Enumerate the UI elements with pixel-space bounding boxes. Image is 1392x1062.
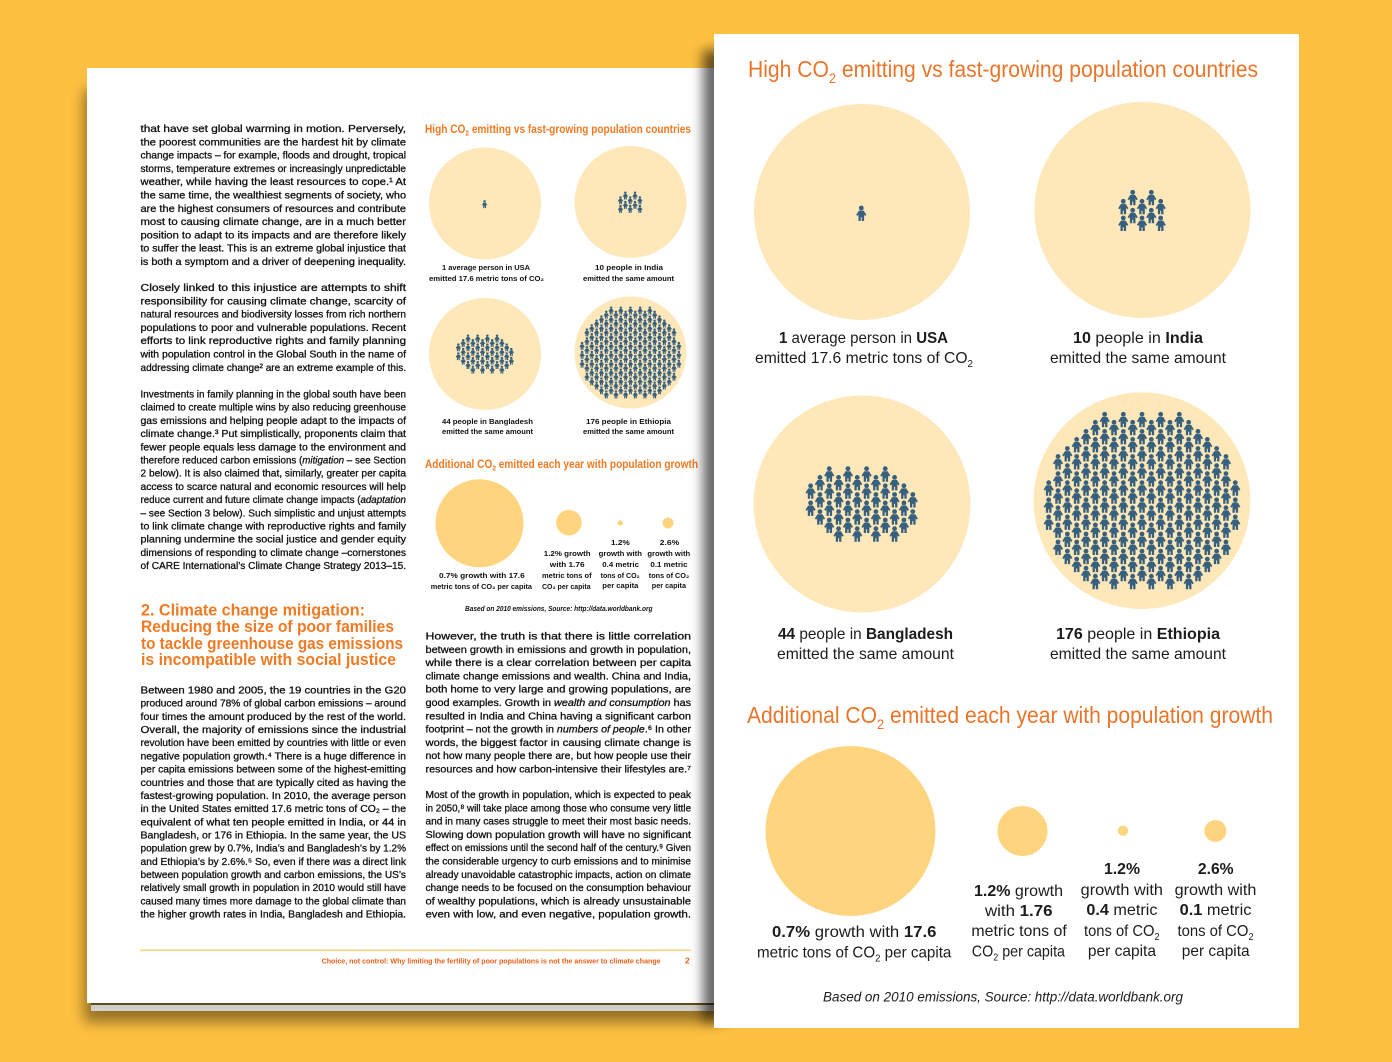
text block: right column paragraphs: change needs to be focused on the consumption behaviour	[426, 883, 692, 894]
text block: left column, top paragraphs: natural resources and biodiversity losses from rich northern	[140, 310, 406, 321]
small captions: growth: CO₂ per capita	[542, 582, 591, 591]
small captions: four countries	[429, 263, 674, 436]
text block: left column, top paragraphs: planning undermine the social justice and gender equity	[140, 535, 407, 546]
small captions: four countries: 1 average person in USA	[442, 263, 530, 272]
text block: left column, bottom paragraph: fastest-growing population. In 2010, the average person	[140, 791, 406, 802]
small captions: growth	[431, 538, 691, 591]
small captions: growth: 0.4 metric	[602, 560, 639, 569]
caption: Ethiopia growth: 2	[1248, 932, 1254, 943]
text block: left column, top paragraphs: efforts to link reproductive rights and family planning	[140, 336, 406, 347]
text block: left column, top paragraphs: Investments in family planning in the global south have been	[140, 390, 406, 400]
footer: rule, running title and page number: Choice, not control: Why limiting the fertility of poor populations is not the answer to climate change	[322, 956, 661, 966]
text block: left column, top paragraphs: are the highest consumers of resources and contribute	[140, 204, 406, 215]
text block: right column paragraphs: even with low, and even negative, population growth.	[426, 910, 691, 921]
text block: left column, top paragraphs: weather, while having the least resources to cope.¹ At	[139, 177, 406, 188]
caption: USA growth: metric tons of CO	[757, 944, 881, 962]
heading: section 2	[141, 602, 403, 669]
caption: Bangladesh growth: 0.4 metric	[1086, 902, 1158, 919]
footer: rule, running title and page number	[140, 950, 691, 966]
text block: left column, bottom paragraph: the higher growth rates in India, Bangladesh and Ethiopia.	[140, 910, 406, 921]
caption: USA: emitted 17.6 metric tons of CO	[755, 350, 972, 367]
text block: left column, bottom paragraph: negative population growth.⁴ There is a huge difference in	[140, 751, 406, 762]
heading: small high CO2 title: 2	[465, 128, 469, 138]
text block: left column, top paragraphs: Closely linked to this injustice are attempts to shift	[140, 283, 406, 294]
text block: right column paragraphs: already unavoidable catastrophic impacts, action on climate	[426, 870, 691, 881]
text block: right column paragraphs: not how many people there are, but how people use their	[426, 751, 692, 762]
caption: India growth: per capita	[998, 944, 1065, 960]
text block: right column paragraphs: footprint – not the growth in numbers of people.⁶ In other	[426, 725, 692, 736]
small captions: growth: tons of CO₂	[601, 571, 640, 580]
text block: left column, top paragraphs: the poorest communities are the hardest hit by climate	[140, 137, 406, 148]
text block: right column paragraphs: However, the truth is that there is little correlation	[426, 632, 691, 642]
text block: left column, bottom paragraph: countries and those that are typically cited as having the	[140, 778, 406, 789]
caption: India: emitted the same amount	[1050, 350, 1227, 367]
small captions: growth: per capita	[652, 581, 687, 590]
text block: left column, bottom paragraph: population grew by 0.7%, India’s and Bangladesh’s by 1.2%	[140, 844, 406, 855]
caption: Bangladesh: emitted the same amount	[777, 646, 955, 663]
text block: left column, top paragraphs: of CARE International’s Climate Change Strategy 2013–15.	[140, 561, 406, 572]
caption: India growth: metric tons of	[971, 923, 1067, 940]
caption: India	[1050, 330, 1227, 367]
small captions: four countries: emitted 17.6 metric tons of CO₂	[429, 274, 544, 283]
caption: India growth: with 1.76	[984, 903, 1053, 920]
text block: left column, top paragraphs: most to causing climate change, are in a much better	[140, 217, 407, 228]
text block: left column, top paragraphs: reduce current and future climate change impacts (adaptation	[140, 495, 406, 506]
text block: right column paragraphs: in 2050,⁸ will take place among those who consume very little	[426, 803, 691, 814]
small captions: four countries: 176 people in Ethiopia	[586, 417, 672, 426]
text block: right column paragraphs: resulted in India and China having a significant carbon	[426, 711, 691, 722]
text block: left column, top paragraphs	[139, 124, 407, 572]
text block: left column, top paragraphs: with population control in the Global South in the name of	[139, 350, 406, 360]
text block: right column paragraphs: effect on emissions until the second half of the century.⁹ Given	[426, 843, 691, 854]
text block: left column, bottom paragraph: in the United States emitted 17.6 metric tons of CO₂ – the	[140, 804, 406, 815]
heading: section 2: Reducing the size of poor families	[141, 618, 394, 636]
heading: small high CO2 title: High CO	[425, 124, 471, 136]
caption: Ethiopia growth: 2.6%	[1198, 861, 1234, 878]
text block: left column, top paragraphs: therefore reduced carbon emissions (mitigation – see Section	[140, 456, 406, 466]
text block: left column, top paragraphs: climate change.³ Put simplistically, proponents claim that	[140, 429, 406, 440]
text block: left column, bottom paragraph: Overall, the majority of emissions since the industrial	[140, 725, 406, 736]
text block: right column paragraphs: the considerable urgency to curb emissions and to minimise	[426, 856, 691, 868]
small captions: growth: 1.2%	[611, 538, 630, 547]
text block: right column paragraphs: of wealthy populations, which is already unsustainable	[426, 896, 691, 907]
caption: Ethiopia growth: growth with	[1175, 882, 1256, 899]
text block: left column, bottom paragraph: caused many times more damage to the global climate than	[140, 896, 406, 907]
text block: left column, top paragraphs: populations to poor and vulnerable populations. Recent	[140, 323, 406, 334]
text block: left column, bottom paragraph: relatively small growth in population in 2010 would still have	[140, 883, 406, 894]
small captions: growth: per capita	[602, 581, 639, 590]
text block: left column, top paragraphs: to link climate change with reproductive rights and family	[140, 522, 407, 532]
small captions: four countries: emitted the same amount	[442, 427, 533, 436]
text block: left column, bottom paragraph: revolution have been emitted by countries with little or even	[140, 738, 406, 749]
text block: left column, bottom paragraph: four times the amount produced by the rest of the world.	[140, 712, 406, 723]
text block: right column paragraphs	[424, 632, 692, 921]
heading: section 2: 2. Climate change mitigation:	[141, 602, 365, 620]
small captions: growth: growth with	[647, 549, 691, 558]
text block: left column, top paragraphs: access to scarce natural and economic resources will help	[140, 482, 406, 493]
caption: Ethiopia growth	[1175, 861, 1256, 960]
small captions: growth: growth with	[599, 549, 642, 558]
caption: Ethiopia: 176 people in Ethiopia	[1056, 626, 1220, 643]
text block: right column paragraphs: while there is a clear correlation between per capita	[424, 658, 691, 669]
caption: USA growth: 0.7% growth with 17.6	[772, 924, 937, 941]
caption: Bangladesh growth: tons of CO	[1084, 923, 1160, 940]
circle: India growth	[998, 806, 1048, 856]
text block: left column, bottom paragraph: and Ethiopia’s by 2.6%.⁵ So, even if there was a direct link	[140, 857, 407, 868]
caption: India growth	[971, 883, 1067, 964]
circle: Bangladesh with 44 people	[754, 396, 970, 612]
caption: USA: 2	[968, 359, 973, 370]
text block: left column, top paragraphs: 2 below). It is also claimed that, similarly, greater per capita	[140, 469, 406, 480]
source note: Based on 2010 emissions, Source: http://data.worldbank.org	[823, 990, 1183, 1004]
text block: left column, top paragraphs: – see Section 3 below). Such simplistic and unjust attempts	[140, 508, 406, 519]
caption: USA growth: 2	[875, 954, 881, 964]
circle: Ethiopia growth	[1204, 820, 1226, 842]
caption: Ethiopia: emitted the same amount	[1050, 646, 1227, 663]
caption: India growth: 1.2% growth	[974, 883, 1063, 900]
text block: left column, bottom paragraph: equivalent of what ten people emitted in India, or 44 in	[140, 817, 406, 828]
small captions: growth: 0.1 metric	[650, 560, 688, 569]
text block: right column paragraphs: Most of the growth in population, which is expected to peak	[426, 790, 692, 801]
caption: Bangladesh growth: 1.2%	[1104, 861, 1140, 878]
caption: Bangladesh	[777, 626, 955, 663]
circle: Ethiopia with 176 people	[1034, 392, 1250, 609]
heading: additional CO2 title: 2	[877, 716, 884, 732]
small captions: four countries: emitted the same amount	[583, 274, 674, 283]
heading: small additional CO2 title: Additional CO	[425, 459, 502, 471]
heading: additional CO2 title: emitted each year with population growth	[884, 702, 1273, 728]
small captions: four countries: 10 people in India	[595, 263, 664, 272]
caption: India growth: 2	[993, 952, 999, 964]
caption: Bangladesh: 44 people in Bangladesh	[778, 626, 953, 643]
text block: left column, top paragraphs: is both a symptom and a driver of deepening inequality.	[140, 257, 406, 268]
caption: Ethiopia	[1050, 626, 1227, 663]
small source note: Based on 2010 emissions, Source: http://data.worldbank.org	[465, 606, 653, 613]
heading: small high CO2 title: emitting vs fast-growing population countries	[469, 124, 691, 136]
small captions: growth: tons of CO₂	[649, 571, 689, 580]
text block: left column, top paragraphs: storms, temperature extremes or increasingly unpredictable	[140, 164, 406, 175]
text block: left column, top paragraphs: dimensions of responding to climate change –cornerstones	[140, 548, 406, 559]
circle: India with 10 people	[1034, 102, 1250, 318]
circle: USA growth	[766, 746, 936, 916]
text block: right column paragraphs: climate change emissions and wealth. China and India,	[426, 671, 691, 682]
text block: left column, bottom paragraph: Between 1980 and 2005, the 19 countries in the G20	[140, 686, 406, 696]
caption: Ethiopia growth: per capita	[1182, 943, 1250, 960]
caption: USA growth: per capita	[880, 944, 951, 962]
text block: left column, top paragraphs: addressing climate change² are an extreme example of this.	[140, 363, 406, 374]
caption: Bangladesh growth	[1081, 861, 1163, 960]
small captions: four countries: emitted the same amount	[583, 427, 674, 436]
text block: right column paragraphs: between growth in emissions and growth in population,	[426, 645, 691, 656]
footer: rule, running title and page number: 2	[685, 956, 690, 966]
text block: left column, top paragraphs: gas emissions and helping people adapt to the impacts of	[140, 416, 406, 427]
text block: left column, top paragraphs: the same time, the wealthiest segments of society, who	[140, 190, 406, 202]
caption: Bangladesh growth: 2	[1154, 932, 1160, 943]
heading: high CO2 title: High CO	[748, 56, 836, 82]
text block: right column paragraphs: good examples. Growth in wealth and consumption has	[426, 698, 691, 709]
text block: left column, top paragraphs: fewer people equals less damage to the environment and	[140, 442, 406, 453]
heading: high CO2 title: 2	[829, 70, 836, 86]
caption: USA: 1 average person in USA	[779, 330, 948, 347]
small captions: growth: 2.6%	[660, 538, 679, 547]
heading: high CO2 title: emitting vs fast-growing population countries	[836, 56, 1258, 82]
text block: left column, top paragraphs: change impacts – for example, floods and drought, tropical	[140, 151, 406, 162]
circle: USA with 1 person	[754, 104, 970, 320]
caption: Ethiopia growth: tons of CO	[1178, 923, 1254, 940]
text block: right column paragraphs: resources and how carbon-intensive their lifestyles are.⁷	[426, 764, 691, 776]
text block: right column paragraphs: words, the biggest factor in causing climate change is	[424, 738, 691, 749]
text block: right column paragraphs: and in many cases struggle to meet their most basic needs.	[426, 817, 691, 828]
heading: small additional CO2 title: emitted each year with population growth	[496, 459, 698, 471]
heading: section 2: to tackle greenhouse gas emissions	[141, 635, 403, 653]
text block: right column paragraphs: both home to very large and growing populations, are	[426, 685, 691, 696]
chart: small growth circles	[436, 479, 674, 567]
caption: USA growth	[757, 924, 951, 964]
text block: right column paragraphs: Slowing down population growth will have no significant	[426, 830, 691, 841]
text block: left column, bottom paragraph: Bangladesh, or 176 in Ethiopia. In the same year, the US	[140, 830, 406, 842]
small captions: growth: metric tons of CO₂ per capita	[431, 582, 533, 591]
small captions: four countries: 44 people in Bangladesh	[442, 417, 533, 426]
caption: Ethiopia growth: 0.1 metric	[1180, 902, 1251, 919]
small captions: growth: metric tons of	[542, 571, 592, 580]
small captions: growth: 1.2% growth	[544, 549, 591, 558]
text block: left column, bottom paragraph: per capita emissions between some of the highest-emitting	[140, 765, 406, 776]
text block: left column, bottom paragraph	[140, 686, 407, 921]
text block: left column, top paragraphs: claimed to create multiple wins by also reducing greenhouse	[140, 403, 406, 414]
circle: Bangladesh growth	[1118, 826, 1128, 836]
small captions: growth: with 1.76	[549, 560, 585, 569]
text block: left column, top paragraphs: position to adapt to its impacts and are therefore likely	[140, 230, 407, 241]
text block: left column, bottom paragraph: produced around 78% of global carbon emissions – around	[140, 699, 406, 710]
caption: India growth: CO	[972, 944, 996, 960]
heading: small additional CO2 title: 2	[492, 464, 496, 472]
text block: left column, top paragraphs: responsibility for causing climate change, scarcity of	[140, 296, 406, 307]
chart: small circles comparison	[429, 146, 686, 410]
caption: USA	[755, 330, 973, 370]
heading: section 2: is incompatible with social justice	[141, 651, 396, 669]
caption: Bangladesh growth: per capita	[1088, 943, 1156, 960]
text block: left column, bottom paragraph: between population growth and carbon emissions, the US’s	[140, 870, 406, 881]
panel: document page	[87, 68, 714, 1003]
text block: left column, top paragraphs: that have set global warming in motion. Perversely,	[140, 124, 406, 135]
caption: Bangladesh growth: growth with	[1081, 882, 1163, 899]
small captions: growth: 0.7% growth with 17.6	[439, 571, 525, 580]
caption: India: 10 people in India	[1073, 330, 1203, 347]
text block: left column, top paragraphs: to suffer the least. This is an extreme global injustice that	[140, 244, 406, 255]
heading: additional CO2 title: Additional CO	[747, 702, 889, 728]
panel: enlarged infographic	[714, 34, 1299, 1028]
